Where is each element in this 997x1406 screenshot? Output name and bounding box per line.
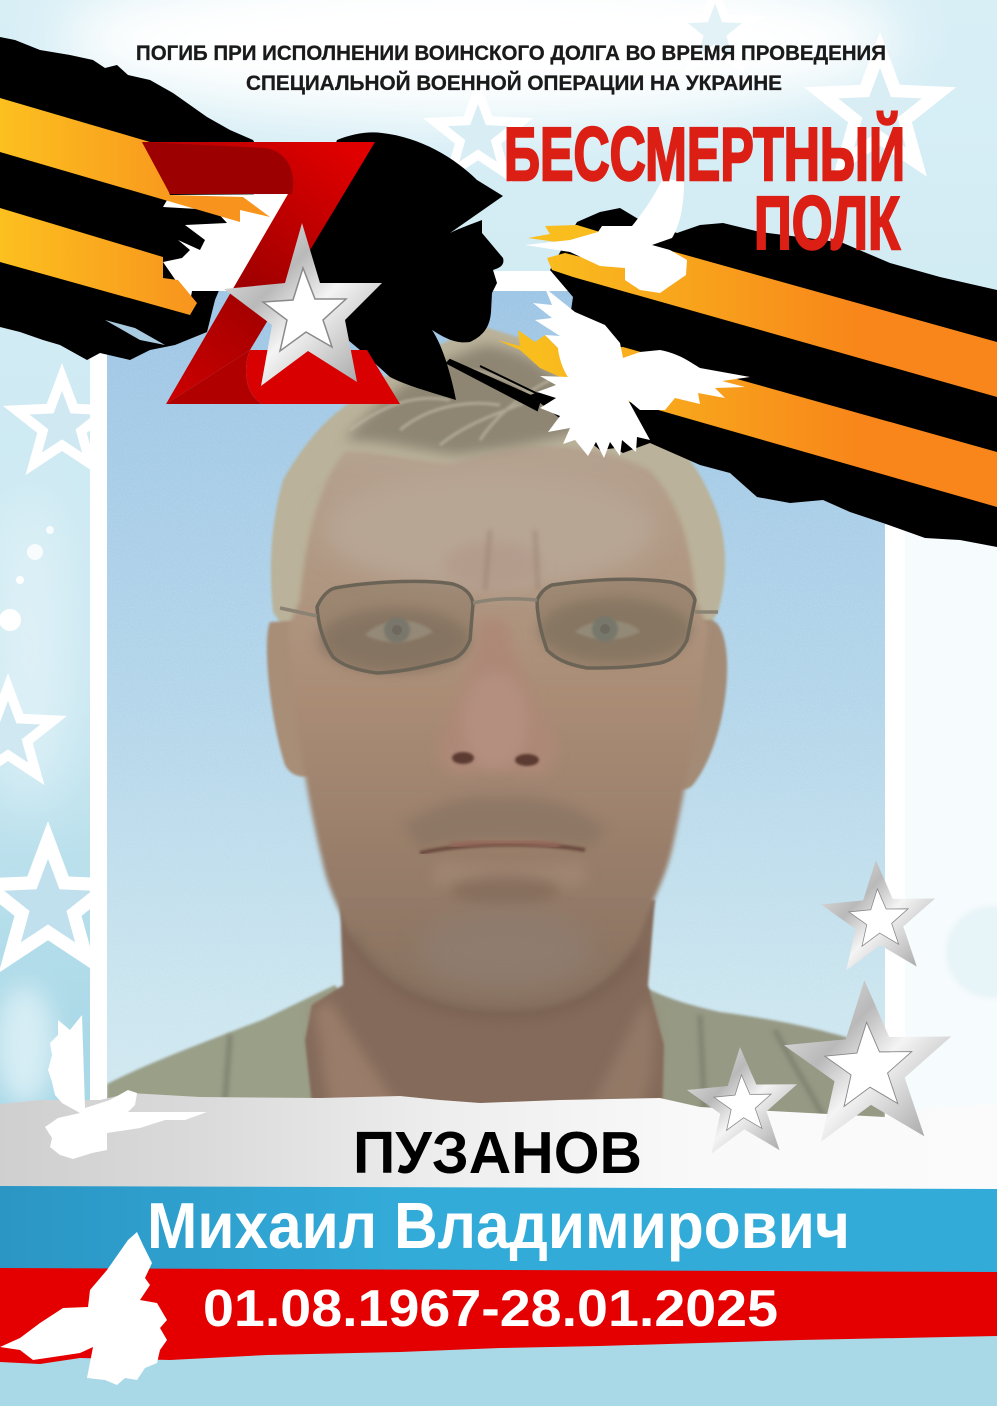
mouth	[420, 844, 585, 853]
head	[288, 447, 708, 1012]
header text: СПЕЦИАЛЬНОЙ ВОЕННОЙ ОПЕРАЦИИ НА УКРАИНЕ	[246, 70, 782, 95]
nostrils	[452, 752, 539, 766]
banner: name strip	[0, 1186, 997, 1274]
silver star	[224, 223, 382, 386]
banner: surname strip	[0, 1093, 997, 1192]
black wedge under dove	[530, 385, 640, 450]
photo: portrait	[107, 291, 885, 1126]
right ribbon stripes	[497, 247, 997, 507]
given name: Михаил Владимирович	[147, 1189, 850, 1262]
Z emblem	[142, 142, 400, 404]
lip shadow	[450, 876, 560, 904]
sky gaps in left ribbon	[105, 320, 165, 345]
forehead	[331, 484, 649, 588]
dove upper	[525, 178, 687, 293]
shirt folds	[225, 1015, 825, 1120]
title: ПОЛК	[754, 181, 900, 265]
left ribbon black	[0, 37, 270, 360]
surname: ПУЗАНОВ	[353, 1120, 642, 1186]
dove bottom left top	[45, 1015, 207, 1159]
shirt right	[648, 988, 885, 1117]
moustache stubble	[408, 796, 600, 846]
title	[504, 112, 905, 265]
dove lower	[533, 288, 750, 458]
photo sky	[107, 291, 885, 1126]
background stars	[0, 0, 956, 973]
nose	[445, 624, 549, 771]
hair top dark streaks	[345, 345, 600, 455]
chin	[431, 924, 579, 986]
yellow splash	[528, 225, 600, 244]
right ribbon black	[550, 208, 997, 547]
dates: 01.08.1967-28.01.2025	[203, 1280, 778, 1338]
shirt left	[107, 984, 338, 1098]
silver stars decoration	[685, 857, 956, 1155]
header text	[136, 41, 886, 95]
soldier silhouette	[300, 132, 503, 400]
hair	[271, 327, 725, 650]
neck	[305, 900, 664, 1125]
white photo frame	[90, 271, 905, 1126]
left ribbon stripes	[0, 98, 270, 315]
banner: dates strip	[0, 1268, 997, 1364]
brush strokes on hair	[447, 360, 540, 410]
left ribbon white tear	[163, 194, 295, 302]
eyes	[365, 616, 640, 643]
dove bottom left lower	[0, 1232, 167, 1385]
eyebrow shadows	[319, 608, 471, 672]
glasses	[280, 579, 718, 673]
ears	[267, 620, 315, 777]
header text: ПОГИБ ПРИ ИСПОЛНЕНИИ ВОИНСКОГО ДОЛГА ВО ВРЕМЯ ПРОВЕДЕНИЯ	[136, 41, 886, 65]
